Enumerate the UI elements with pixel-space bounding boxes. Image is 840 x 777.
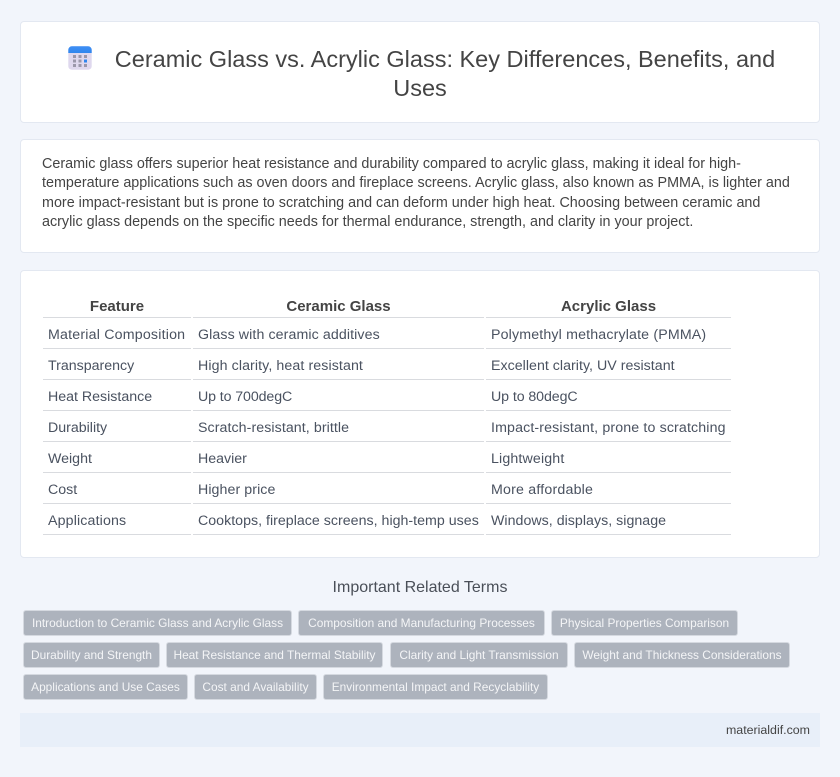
row: weight: Heavier [198, 451, 247, 467]
row: material composition: Material Composition [48, 327, 185, 343]
tag [23, 642, 160, 668]
tag [166, 642, 383, 668]
panel: intro paragraph [20, 139, 820, 253]
footer source text: materialdif.com [726, 723, 810, 737]
tag [298, 610, 545, 636]
intro text [42, 156, 790, 230]
tag [194, 674, 317, 700]
row: material composition [48, 327, 706, 343]
tag: Environmental Impact and Recyclability [332, 680, 539, 694]
tag: Clarity and Light Transmission [399, 648, 559, 662]
row: applications: Applications [48, 513, 126, 529]
tag: Weight and Thickness Considerations [582, 648, 782, 662]
table header row: Acrylic Glass [561, 298, 656, 315]
tag [23, 674, 188, 700]
row: material composition: Polymethyl methacrylate (PMMA) [491, 327, 706, 343]
tag: Durability and Strength [31, 648, 152, 662]
title [115, 46, 775, 101]
tag: Introduction to Ceramic Glass and Acrylic Glass [32, 616, 283, 630]
intro text: temperature applications such as oven doors and fireplace screens. Acrylic glass, also known as PMMA, is lighter and [42, 175, 790, 191]
title: Ceramic Glass vs. Acrylic Glass: Key Differences, Benefits, and [115, 46, 775, 72]
row: applications: Cooktops, fireplace screens, high-temp uses [198, 513, 479, 529]
tag: Applications and Use Cases [31, 680, 180, 694]
intro text: more impact-resistant but is prone to scratching and can deform under high heat. Choosing between ceramic and [42, 195, 760, 211]
table header row [90, 298, 656, 315]
row: transparency [48, 358, 675, 374]
row: applications: Windows, displays, signage [491, 513, 666, 529]
icon: calendar grid [68, 46, 92, 70]
row: weight: Lightweight [491, 451, 564, 467]
heading: related terms: Important Related Terms [333, 579, 507, 596]
row: cost: Cost [48, 482, 77, 498]
tag [390, 642, 568, 668]
row: cost [48, 482, 593, 498]
row: transparency: Transparency [48, 358, 134, 374]
intro text: acrylic glass depends on the specific needs for thermal endurance, strength, and clarity in your project. [42, 214, 693, 230]
row: weight [48, 451, 564, 467]
row: heat resistance [48, 389, 578, 405]
tag [323, 674, 548, 700]
row: durability: Scratch-resistant, brittle [198, 420, 349, 436]
row: weight: Weight [48, 451, 92, 467]
panel: related term tags [23, 610, 790, 700]
row: cost: More affordable [491, 482, 593, 498]
row: applications [48, 513, 666, 529]
row: heat resistance: Up to 700degC [198, 389, 292, 405]
footer bar [20, 713, 820, 747]
tag [23, 610, 292, 636]
tag: Heat Resistance and Thermal Stability [173, 648, 376, 662]
row: heat resistance: Heat Resistance [48, 389, 152, 405]
tag: Composition and Manufacturing Processes [308, 616, 535, 630]
row: transparency: High clarity, heat resistant [198, 358, 363, 374]
tag [574, 642, 790, 668]
table header row: Feature [90, 298, 144, 315]
tag: Cost and Availability [202, 680, 309, 694]
panel: title header [20, 21, 820, 123]
tag: Physical Properties Comparison [560, 616, 729, 630]
row: durability: Durability [48, 420, 107, 436]
panel: comparison table [20, 270, 820, 558]
row: cost: Higher price [198, 482, 275, 498]
title: Uses [393, 75, 447, 101]
intro text: Ceramic glass offers superior heat resistance and durability compared to acrylic glass, making it ideal for high- [42, 156, 741, 172]
row: heat resistance: Up to 80degC [491, 389, 578, 405]
row: transparency: Excellent clarity, UV resistant [491, 358, 675, 374]
row: durability [48, 420, 726, 436]
table header row: Ceramic Glass [286, 298, 391, 315]
row: material composition: Glass with ceramic additives [198, 327, 380, 343]
tag [551, 610, 738, 636]
row: durability: Impact-resistant, prone to scratching [491, 420, 726, 436]
